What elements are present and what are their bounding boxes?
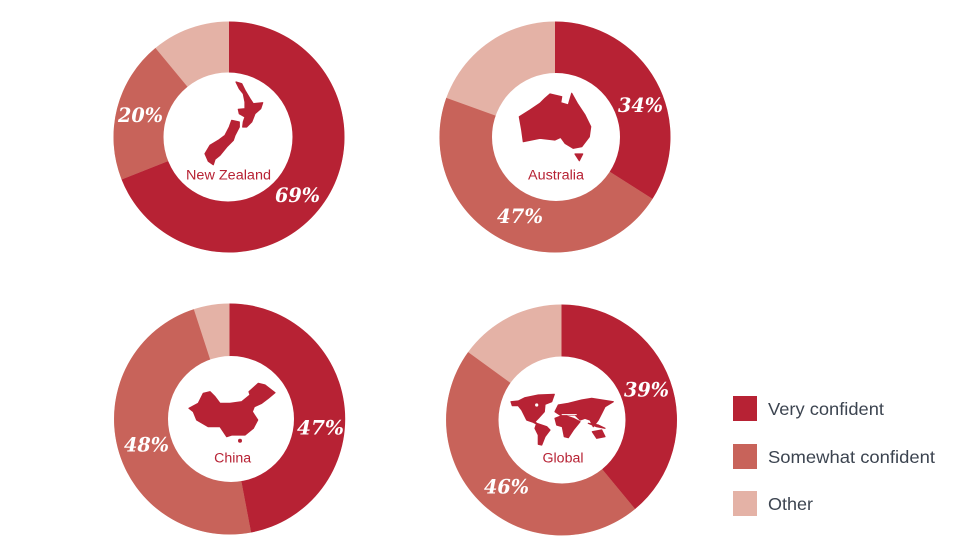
centre hole bbox=[498, 356, 626, 484]
value: 20%: 20% bbox=[117, 103, 163, 127]
segment: very confident 69% bbox=[122, 22, 344, 252]
value: 69%: 69% bbox=[275, 183, 320, 207]
segment: other bbox=[440, 22, 670, 252]
value: 46%: 46% bbox=[484, 474, 529, 498]
value: 47%: 47% bbox=[297, 416, 344, 440]
centre hole bbox=[492, 73, 620, 201]
legend item: very confident bbox=[733, 396, 884, 421]
label: China: China bbox=[214, 450, 252, 466]
segment: other bbox=[114, 304, 345, 534]
segment: very confident 34% bbox=[555, 22, 670, 199]
icon: New Zealand map bbox=[205, 82, 263, 165]
value: 39%: 39% bbox=[624, 378, 669, 402]
legend item: other: Other bbox=[768, 494, 813, 514]
donut: China bbox=[114, 303, 345, 535]
segment: somewhat confident 20% bbox=[114, 48, 229, 180]
legend item: very confident: Very confident bbox=[768, 399, 884, 419]
legend item: somewhat confident bbox=[733, 444, 935, 469]
value: 34%: 34% bbox=[618, 93, 663, 117]
centre hole bbox=[164, 72, 292, 202]
segment: somewhat confident 47% bbox=[439, 98, 652, 253]
label: Australia: Australia bbox=[528, 168, 585, 182]
segment: other bbox=[114, 22, 344, 252]
segment: somewhat confident 46% bbox=[446, 352, 635, 535]
icon: world map bbox=[511, 394, 613, 445]
label: New Zealand: New Zealand bbox=[186, 168, 271, 182]
legend item: other bbox=[733, 491, 813, 516]
segment: somewhat confident 48% bbox=[114, 309, 251, 535]
segment: very confident 39% bbox=[562, 304, 677, 509]
donut: New Zealand bbox=[114, 22, 344, 252]
centre hole bbox=[168, 356, 294, 482]
icon: Australia map bbox=[519, 93, 591, 161]
donut: Global bbox=[446, 304, 677, 536]
legend bbox=[733, 396, 935, 516]
segment: other bbox=[446, 304, 677, 536]
segment: very confident 47% bbox=[230, 303, 345, 532]
legend item: somewhat confident: Somewhat confident bbox=[768, 447, 935, 467]
label: Global: Global bbox=[542, 450, 584, 466]
icon: China map bbox=[189, 383, 275, 442]
donut: Australia bbox=[439, 22, 670, 253]
value: 47%: 47% bbox=[497, 204, 543, 228]
value: 48%: 48% bbox=[124, 432, 169, 456]
